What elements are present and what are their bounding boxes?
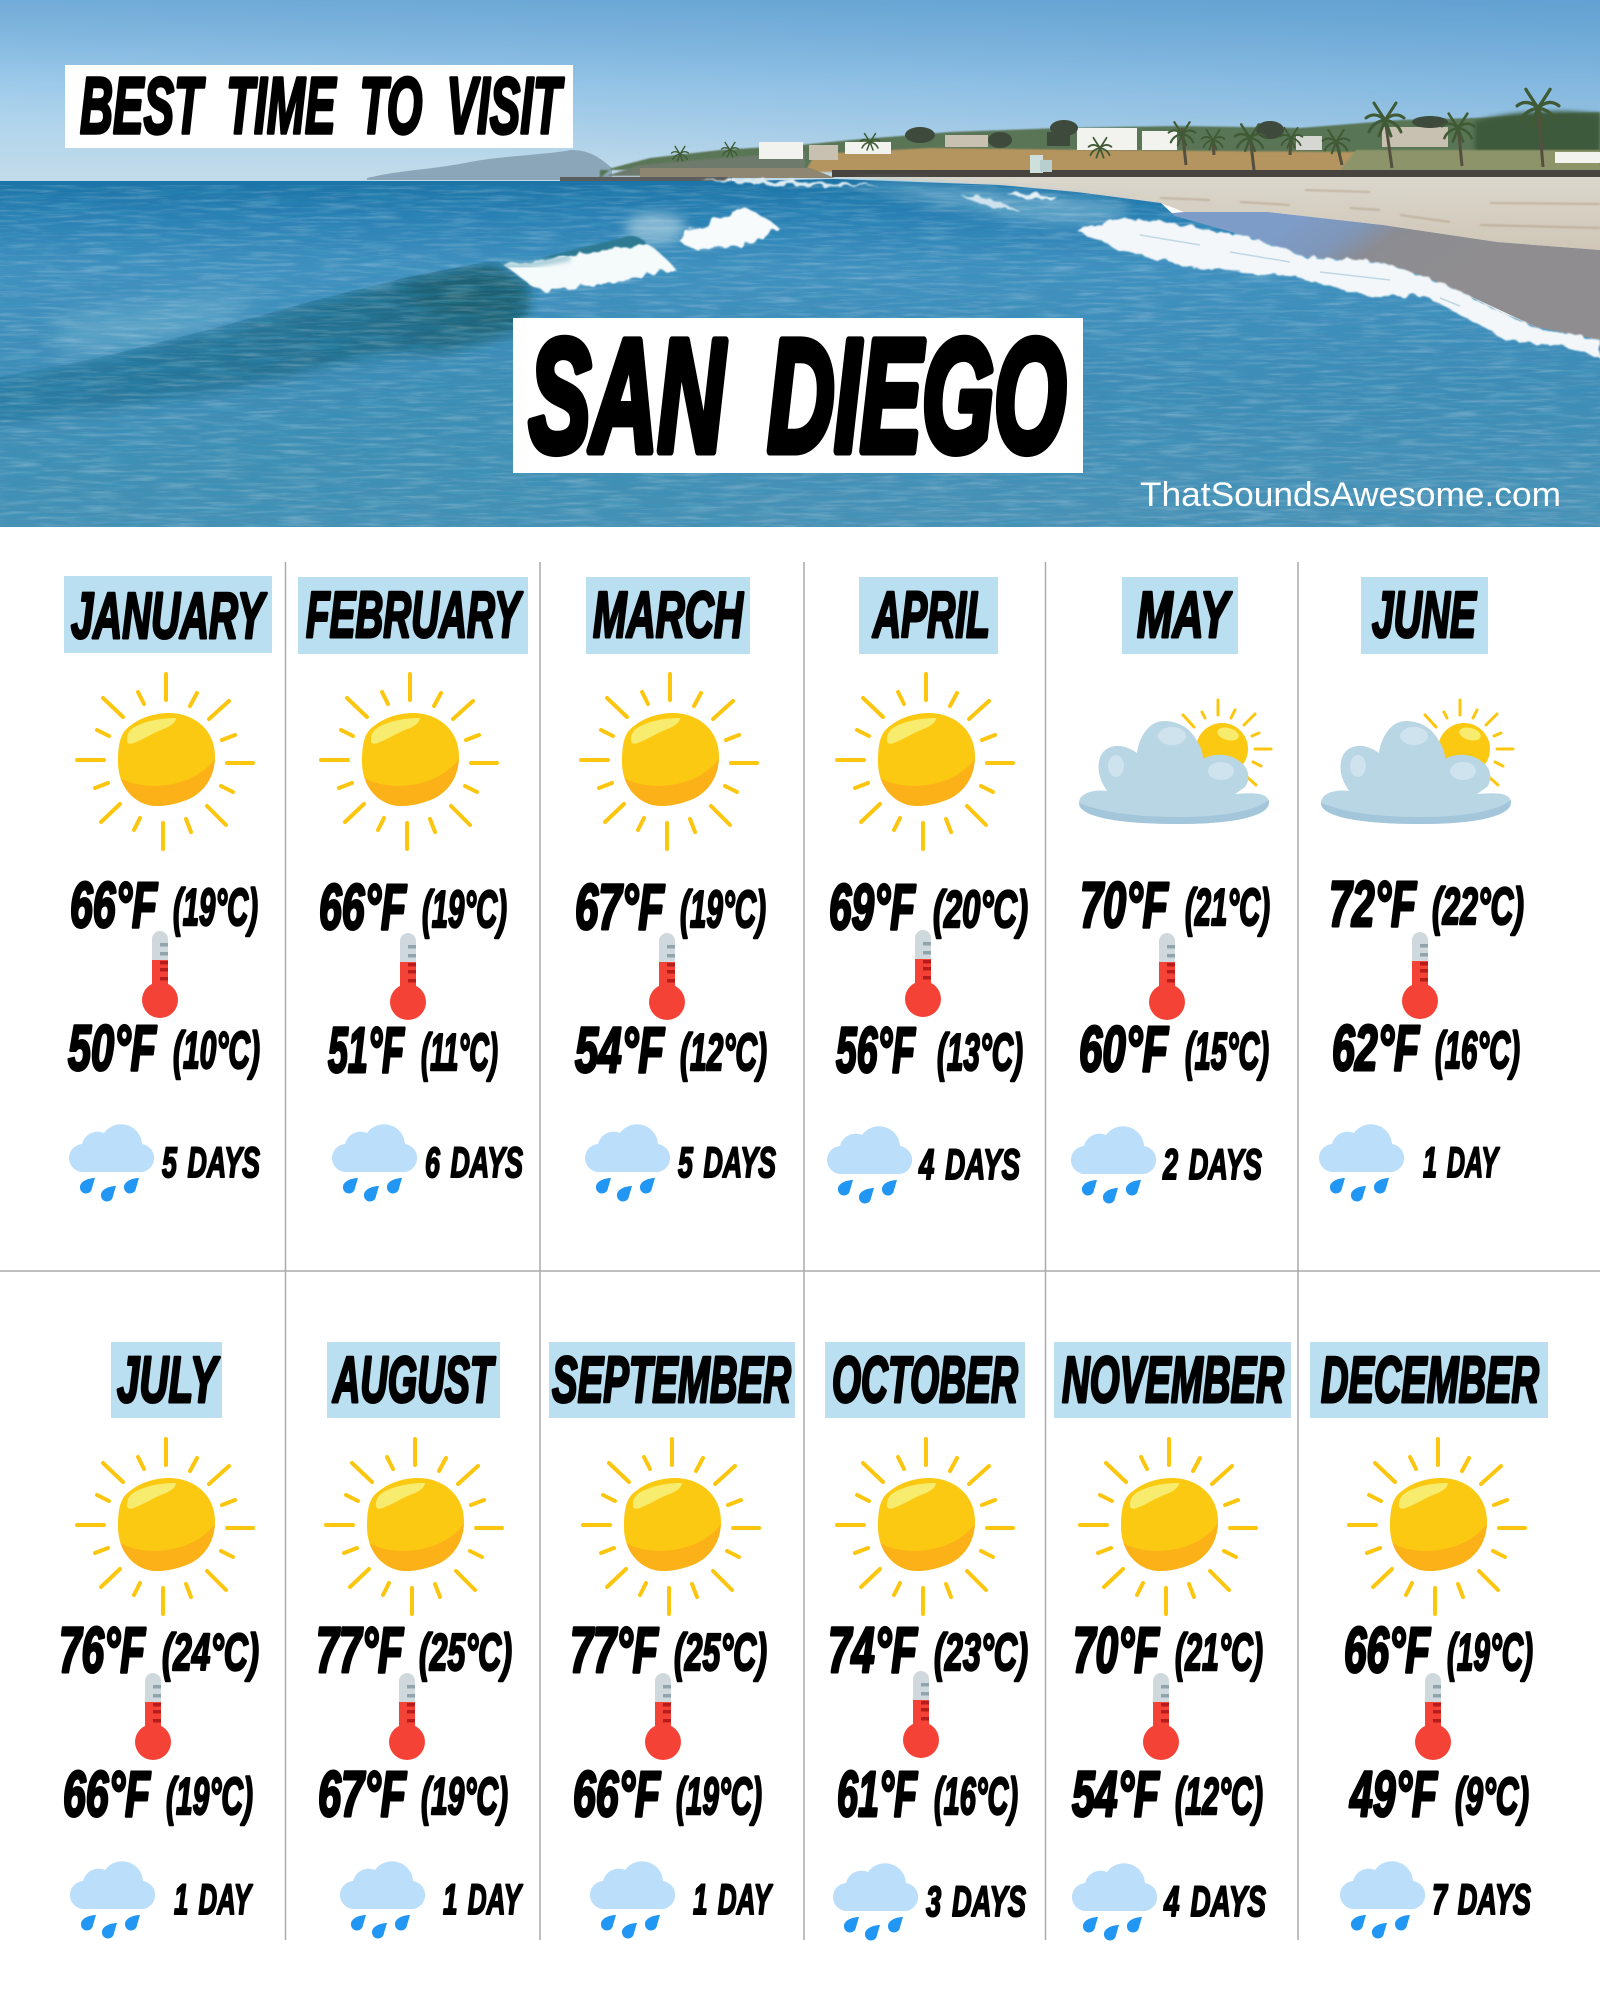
high temperature: (21°C) xyxy=(1175,1624,1263,1682)
low temperature: 66°F xyxy=(573,1758,661,1830)
low temperature: 56°F xyxy=(836,1014,916,1086)
high temperature: 70°F xyxy=(1080,869,1169,941)
low temperature: 61°F xyxy=(837,1758,918,1830)
month label: JUNE xyxy=(1372,578,1477,651)
low temperature: (15°C) xyxy=(1185,1023,1269,1081)
rainy days: 3 DAYS xyxy=(926,1878,1026,1926)
low temperature: 66°F xyxy=(63,1758,151,1830)
high temperature xyxy=(829,871,1028,943)
rainy days xyxy=(1319,1124,1500,1202)
high temperature: 66°F xyxy=(70,869,158,941)
icon: thermometer xyxy=(1149,933,1185,1020)
high temperature: 66°F xyxy=(319,871,407,943)
rainy days xyxy=(827,1126,1020,1204)
icon: sun xyxy=(321,674,497,849)
high temperature: 76°F xyxy=(59,1614,146,1686)
high temperature: (19°C) xyxy=(680,881,766,939)
icon: thermometer xyxy=(390,933,426,1020)
icon: thermometer xyxy=(135,1673,171,1760)
rainy days: 1 DAY xyxy=(443,1876,523,1924)
month label: SEPTEMBER xyxy=(552,1343,791,1416)
high temperature xyxy=(59,1614,259,1686)
high temperature: 69°F xyxy=(829,871,916,943)
month: December xyxy=(1310,1342,1548,1939)
distant headland xyxy=(367,150,612,180)
icon: sun xyxy=(77,674,253,849)
rainy days: 7 DAYS xyxy=(1432,1876,1531,1924)
rainy days xyxy=(69,1124,260,1202)
month: February xyxy=(298,577,528,1202)
high temperature: 70°F xyxy=(1073,1614,1160,1686)
shore foam xyxy=(700,180,1600,357)
low temperature: 60°F xyxy=(1079,1013,1169,1085)
high temperature: (19°C) xyxy=(173,879,258,937)
sand beach xyxy=(832,177,1600,250)
rainy days: 4 DAYS xyxy=(1163,1878,1266,1926)
icon: sun xyxy=(77,1439,253,1614)
rainy days xyxy=(833,1863,1026,1941)
icon: thermometer xyxy=(1143,1673,1179,1760)
icon: partly cloudy xyxy=(1321,700,1513,824)
month label xyxy=(1361,577,1488,654)
low temperature: (13°C) xyxy=(937,1024,1023,1082)
cliff and town xyxy=(560,89,1600,184)
month label xyxy=(549,1342,795,1418)
month label: FEBRUARY xyxy=(306,578,523,651)
high temperature: 66°F xyxy=(1344,1614,1431,1686)
high temperature: 74°F xyxy=(828,1614,918,1686)
month: July xyxy=(59,1342,259,1939)
month label xyxy=(1054,1342,1291,1418)
title: San Diego: SAN DIEGO xyxy=(529,306,1066,485)
ocean xyxy=(0,179,1600,527)
seaweed streaks on sand xyxy=(1160,190,1600,228)
low temperature: (16°C) xyxy=(1435,1022,1520,1080)
month label xyxy=(859,577,998,654)
rainy days: 1 DAY xyxy=(174,1876,253,1924)
low temperature: (11°C) xyxy=(421,1024,498,1082)
high temperature: (19°C) xyxy=(422,881,507,939)
icon: sun xyxy=(837,1439,1013,1614)
rainy days xyxy=(1072,1863,1266,1941)
month: September xyxy=(549,1342,795,1939)
low temperature: (10°C) xyxy=(173,1022,260,1080)
icon: thermometer xyxy=(142,931,178,1018)
month: October xyxy=(825,1342,1028,1941)
high temperature xyxy=(828,1614,1028,1686)
month label: JANUARY xyxy=(71,579,267,652)
high temperature: (20°C) xyxy=(933,881,1028,939)
month label: APRIL xyxy=(872,578,990,651)
icon: thermometer xyxy=(645,1673,681,1760)
rainy days: 5 DAYS xyxy=(678,1139,776,1187)
month: January xyxy=(64,576,272,1202)
month label: NOVEMBER xyxy=(1062,1343,1284,1416)
rainy days xyxy=(1071,1126,1262,1204)
title: best time to visit xyxy=(65,61,573,150)
month label: OCTOBER xyxy=(832,1343,1018,1416)
icon: thermometer xyxy=(903,1671,939,1758)
month label: MAY xyxy=(1137,578,1233,651)
high temperature: (25°C) xyxy=(674,1624,767,1682)
rainy days xyxy=(585,1124,776,1202)
rainy days: 5 DAYS xyxy=(162,1139,260,1187)
rainy days xyxy=(70,1861,253,1939)
icon: thermometer xyxy=(1415,1673,1451,1760)
high temperature: (22°C) xyxy=(1432,878,1524,936)
high temperature: (21°C) xyxy=(1185,879,1270,937)
icon: partly cloudy xyxy=(1079,700,1271,824)
month label xyxy=(111,1342,222,1418)
month label xyxy=(586,577,750,654)
website credit: ThatSoundsAwesome.com xyxy=(1140,476,1561,514)
wave face xyxy=(0,262,530,425)
low temperature: (12°C) xyxy=(680,1024,767,1082)
low temperature: 54°F xyxy=(1072,1758,1160,1830)
rainy days xyxy=(332,1124,523,1202)
breaking wave crest xyxy=(502,208,778,290)
icon: sun xyxy=(1080,1439,1256,1614)
low temperature: (16°C) xyxy=(934,1768,1018,1826)
rainy days xyxy=(340,1861,523,1939)
high temperature: 77°F xyxy=(316,1614,404,1686)
high temperature: (25°C) xyxy=(419,1624,512,1682)
photo: San Diego beach xyxy=(0,0,1600,527)
low temperature: 62°F xyxy=(1332,1012,1420,1084)
rainy days xyxy=(590,1861,773,1939)
month label xyxy=(64,576,272,653)
month: November xyxy=(1054,1342,1291,1941)
high temperature: 72°F xyxy=(1329,868,1417,940)
month label xyxy=(298,577,528,654)
rainy days: 2 DAYS xyxy=(1162,1141,1262,1189)
high temperature: (24°C) xyxy=(162,1624,259,1682)
high temperature: 77°F xyxy=(570,1614,659,1686)
month label xyxy=(1122,577,1238,654)
low temperature: (9°C) xyxy=(1455,1768,1529,1826)
title: San Diego xyxy=(513,306,1083,485)
low temperature: 50°F xyxy=(68,1012,157,1084)
icon: sun xyxy=(583,1439,759,1614)
month label xyxy=(825,1342,1025,1418)
month: March xyxy=(575,577,776,1202)
title: best time to visit: BEST TIME TO VISIT xyxy=(80,61,565,150)
rainy days: 4 DAYS xyxy=(918,1141,1020,1189)
icon: thermometer xyxy=(649,933,685,1020)
high temperature xyxy=(1329,868,1524,940)
icon: thermometer xyxy=(905,930,941,1017)
high temperature: (23°C) xyxy=(934,1624,1028,1682)
low temperature: 67°F xyxy=(318,1758,407,1830)
icon: sun xyxy=(1349,1439,1525,1614)
high temperature xyxy=(316,1614,512,1686)
low temperature: 51°F xyxy=(328,1014,405,1086)
low temperature: (12°C) xyxy=(1175,1768,1263,1826)
icon: thermometer xyxy=(389,1673,425,1760)
low temperature: (19°C) xyxy=(421,1768,508,1826)
wet sand xyxy=(1150,212,1600,345)
month: June xyxy=(1319,577,1524,1202)
rainy days: 6 DAYS xyxy=(425,1139,523,1187)
icon: sun xyxy=(837,674,1013,849)
low temperature: 54°F xyxy=(575,1014,665,1086)
month label: MARCH xyxy=(593,578,744,651)
high temperature xyxy=(570,1614,767,1686)
month label: JULY xyxy=(117,1343,220,1416)
water ripples xyxy=(0,185,1600,527)
month label xyxy=(327,1342,500,1418)
high temperature: 67°F xyxy=(575,871,665,943)
high temperature: (19°C) xyxy=(1447,1624,1533,1682)
low temperature: (19°C) xyxy=(166,1768,253,1826)
icon: thermometer xyxy=(1402,932,1438,1019)
low temperature: (19°C) xyxy=(676,1768,762,1826)
month: May xyxy=(1071,577,1271,1204)
rainy days: 1 DAY xyxy=(693,1876,773,1924)
rainy days: 1 DAY xyxy=(1423,1139,1500,1187)
month: August xyxy=(316,1342,523,1939)
month label: AUGUST xyxy=(332,1343,496,1416)
rainy days xyxy=(1340,1861,1531,1939)
icon: sun xyxy=(326,1439,502,1614)
icon: sun xyxy=(581,674,757,849)
month: April xyxy=(827,577,1028,1204)
sky xyxy=(0,0,1600,185)
low temperature: 49°F xyxy=(1349,1758,1438,1830)
